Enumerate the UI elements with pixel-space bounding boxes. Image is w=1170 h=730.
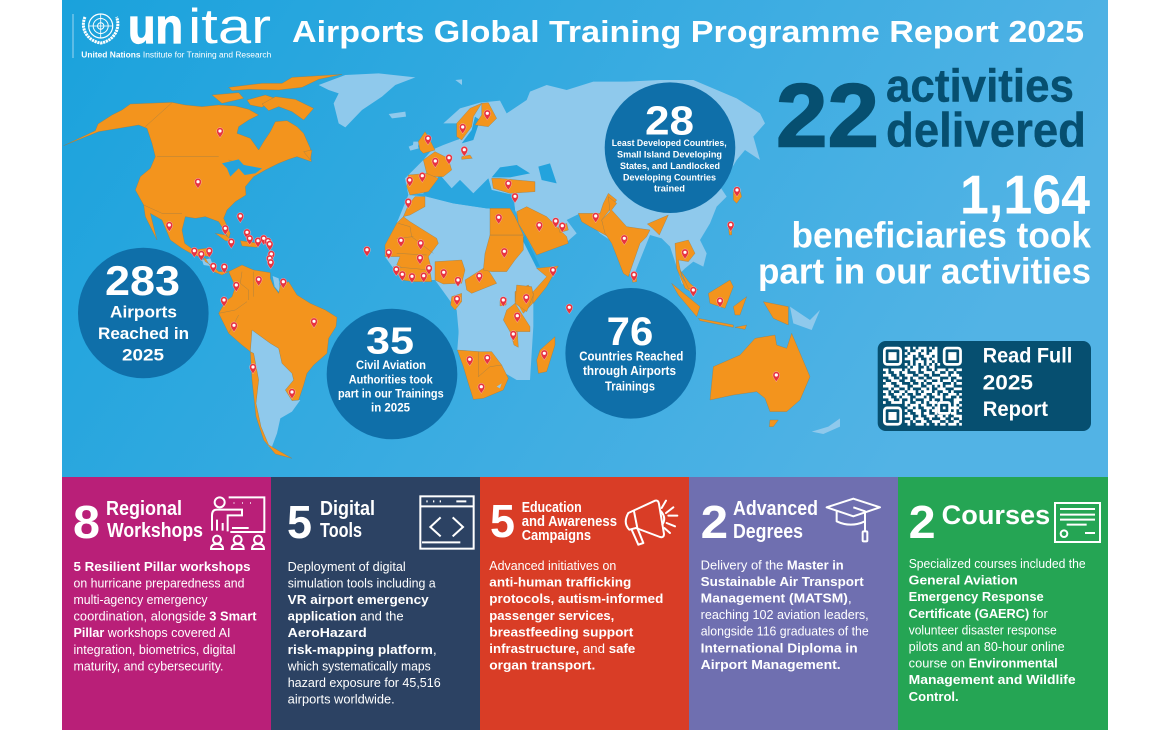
- logo: UNITAR: [73, 0, 271, 60]
- text block: Certificate (GAERC) for: [909, 607, 1048, 621]
- text block: risk-mapping platform ,: [288, 643, 437, 657]
- text block: Airport Management.: [701, 658, 841, 672]
- map: southern Africa, Indonesia and Oceania: [457, 270, 840, 434]
- stat: 1,164 beneficiaries: part in our activities: [758, 250, 1091, 291]
- text block: Control.: [909, 690, 959, 704]
- callout: QR code read full report: 2025: [983, 370, 1033, 394]
- circle stat: 283 airports: Airports: [110, 302, 177, 321]
- text block: infrastructure, and safe: [489, 642, 635, 656]
- text block: coordination, alongside 3 Smart: [74, 610, 257, 624]
- circle stat: 35 civil aviation authorities: Authorities took: [349, 372, 433, 386]
- number 5: 5: [490, 495, 515, 547]
- heading: Tools: [320, 520, 362, 542]
- stat: 22 activities delivered: activities: [886, 60, 1074, 112]
- text block: breastfeeding support: [489, 625, 634, 639]
- heading: Digital: [320, 498, 375, 520]
- text block: [74, 560, 257, 673]
- circle stat: 28 least developed countries: Small Island Developing: [617, 150, 722, 161]
- text block: reaching 102 aviation leaders,: [701, 608, 869, 622]
- text block: simulation tools including a: [288, 576, 436, 590]
- map: Eurasia and Africa: [385, 80, 765, 380]
- header and map background: [62, 0, 1108, 478]
- text block: [701, 558, 869, 672]
- text block: General Aviation: [909, 574, 1018, 588]
- heading: Advanced: [733, 498, 818, 520]
- text block: maturity, and cybersecurity.: [74, 659, 224, 673]
- text block: integration, biometrics, digital: [74, 643, 235, 657]
- logo: UNITAR: un: [128, 0, 183, 54]
- panel: advanced degrees: [689, 477, 898, 730]
- heading: Courses: [942, 500, 1050, 530]
- text block: AeroHazard: [288, 626, 367, 640]
- stat: 22 activities delivered: delivered: [886, 105, 1086, 158]
- text block: hazard exposure for 45,516: [288, 676, 441, 690]
- circle stat: 28 least developed countries: States, and Landlocked: [620, 161, 720, 172]
- text block: Deployment of digital: [288, 560, 406, 574]
- icon: presenter at board: [211, 497, 264, 549]
- text block: volunteer disaster response: [909, 623, 1057, 637]
- text block: International Diploma in: [701, 641, 858, 655]
- callout: QR code read full report: Read Full: [983, 344, 1072, 368]
- circle stat: 283 airports: [78, 248, 209, 378]
- circle stat: 76 countries: [565, 288, 696, 419]
- circle stat: 283 airports: 283: [105, 257, 180, 304]
- stat: 1,164 beneficiaries: [758, 163, 1092, 291]
- circle stat: 35 civil aviation authorities: Civil Aviation: [356, 358, 426, 372]
- text block: [489, 559, 663, 673]
- heading: [106, 498, 203, 542]
- text block: passenger services,: [489, 609, 614, 623]
- text block: Sustainable Air Transport: [701, 575, 865, 589]
- logo: UNITAR: United Nations Institute for Training and Research: [81, 50, 271, 60]
- text block: which systematically maps: [287, 659, 431, 673]
- circle stat: 35 civil aviation authorities: 35: [366, 320, 414, 362]
- panel: education and awareness campaigns: [480, 477, 689, 730]
- circle stat: 28 least developed countries: [605, 82, 735, 213]
- icon: QR code: [883, 348, 962, 424]
- number 2: 2: [909, 496, 936, 548]
- heading: [522, 500, 617, 544]
- circle stat: 283 airports: Reached in: [98, 324, 189, 343]
- text block: airports worldwide.: [288, 692, 395, 706]
- panel: regional workshops: [62, 477, 271, 730]
- circle stat: 283 airports: 2025: [122, 346, 164, 365]
- icon: megaphone: [626, 500, 677, 545]
- heading: Workshops: [107, 520, 203, 542]
- heading: Campaigns: [522, 528, 591, 544]
- heading: [733, 498, 818, 543]
- number 8: 8: [73, 496, 100, 548]
- panel: digital tools: [271, 477, 480, 730]
- map location markers: [166, 110, 780, 399]
- number 5: 5: [287, 496, 312, 548]
- text block: VR airport emergency: [288, 593, 429, 607]
- circle stat: 76 countries: Countries Reached: [579, 350, 683, 364]
- text block: [287, 560, 441, 706]
- panel: courses: [898, 477, 1108, 730]
- circle stat: 28 least developed countries: Developing Countries: [623, 173, 716, 184]
- world map: [64, 73, 840, 458]
- text block: Management (MATSM) ,: [701, 592, 852, 606]
- circle stat: 76 countries: through Airports: [583, 364, 676, 378]
- circle stat: 35 civil aviation authorities: in 2025: [371, 401, 410, 415]
- stat: 22 activities delivered: 22: [776, 67, 879, 167]
- icon: certificate: [1055, 503, 1100, 542]
- text block: protocols, autism-informed: [489, 592, 663, 606]
- heading: Degrees: [733, 521, 803, 543]
- stat: 1,164 beneficiaries: 1,164: [960, 163, 1090, 225]
- text block: Emergency Response: [909, 590, 1044, 604]
- callout: QR code read full report: Report: [983, 397, 1048, 421]
- circle stat: 28 least developed countries: Least Developed Countries,: [612, 138, 727, 149]
- icon: UN emblem: [83, 14, 118, 43]
- stat: 22 activities delivered: [776, 60, 1086, 167]
- heading: and Awareness: [522, 514, 617, 530]
- icon: graduation cap: [827, 499, 880, 541]
- circle stat: 76 countries: 76: [607, 310, 653, 354]
- text block: Specialized courses included the: [909, 557, 1086, 571]
- circle stat: 76 countries: Trainings: [605, 380, 655, 394]
- callout: QR code read full report: [878, 341, 1091, 431]
- circle stat: 35 civil aviation authorities: part in our Trainings: [338, 387, 444, 401]
- text block: course on Environmental: [909, 657, 1058, 671]
- text block: Pillar workshops covered AI: [74, 626, 230, 640]
- map: Americas and Greenland: [64, 73, 495, 458]
- text block: Management and Wildlife: [909, 673, 1076, 687]
- text block: multi-agency emergency: [74, 593, 208, 607]
- text block: on hurricane preparedness and: [74, 576, 245, 590]
- heading: Regional: [106, 498, 182, 520]
- text block: Advanced initiatives on: [489, 559, 616, 573]
- text block: anti-human trafficking: [489, 576, 631, 590]
- title: Airports Global Training Programme Report 2025: [292, 14, 1084, 49]
- logo: UNITAR: itar: [188, 0, 271, 54]
- text block: alongside 116 graduates of the: [701, 625, 869, 639]
- heading: Education: [522, 500, 582, 516]
- icon: code window: [420, 496, 474, 549]
- number 2: 2: [701, 496, 728, 548]
- stat: 1,164 beneficiaries: beneficiaries took: [792, 214, 1092, 255]
- text block: [909, 557, 1086, 704]
- heading: [320, 498, 375, 542]
- circle stat: 28 least developed countries: trained: [654, 184, 685, 195]
- text block: pilots and an 80-hour online: [909, 640, 1065, 654]
- text block: 5 Resilient Pillar workshops: [74, 560, 251, 574]
- circle stat: 35 civil aviation authorities: [327, 309, 457, 439]
- text block: application and the: [288, 610, 404, 624]
- text block: Delivery of the Master in: [701, 558, 844, 572]
- circle stat: 28 least developed countries: 28: [645, 97, 694, 143]
- text block: organ transport.: [489, 659, 595, 673]
